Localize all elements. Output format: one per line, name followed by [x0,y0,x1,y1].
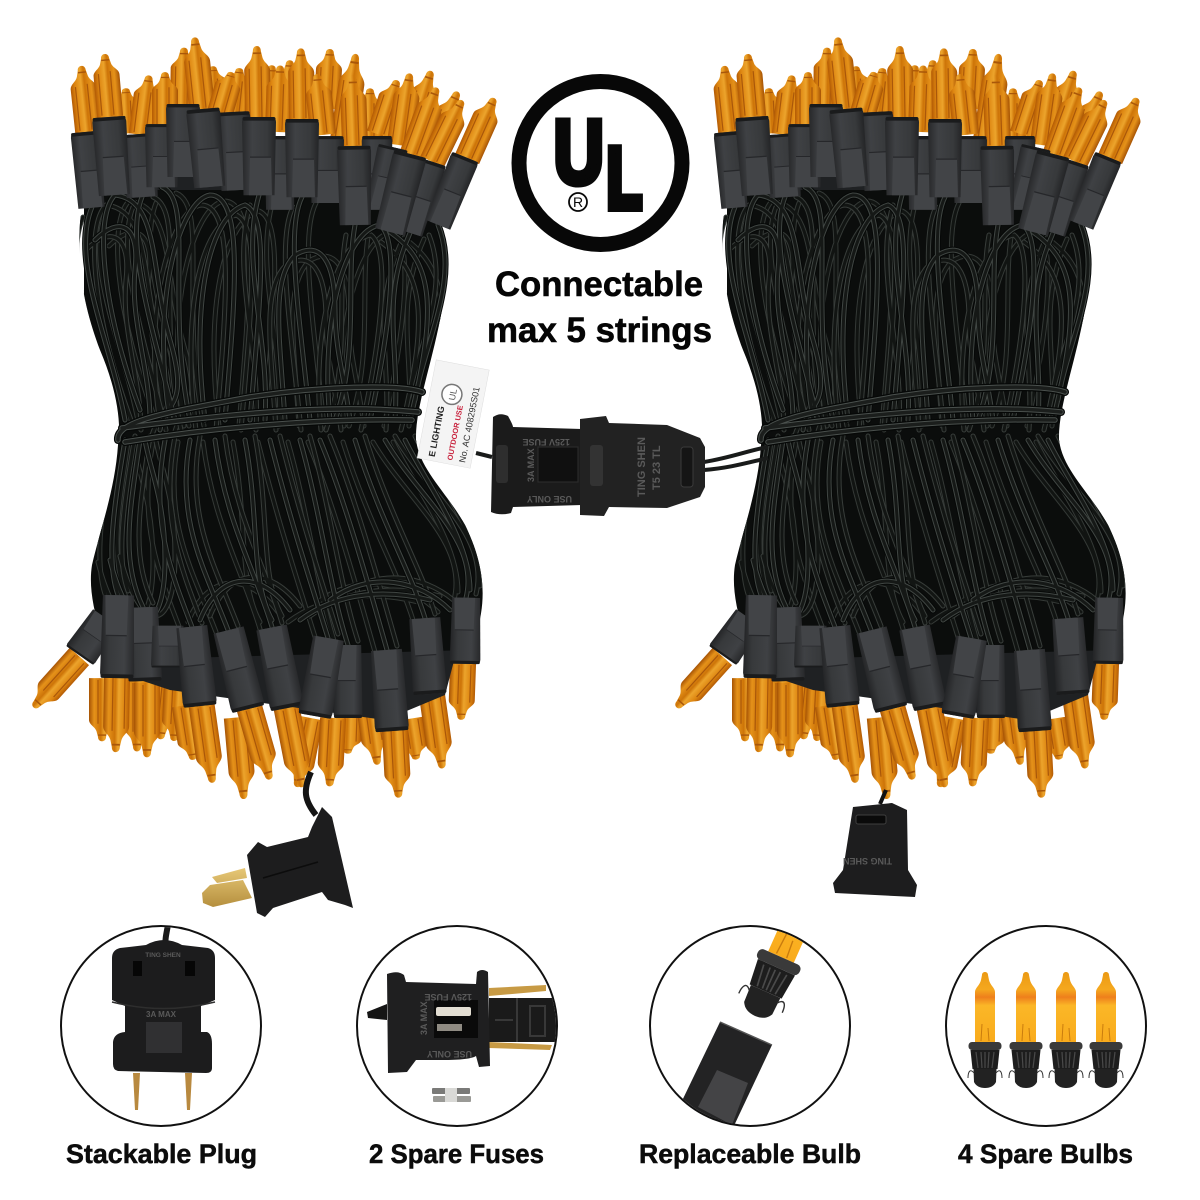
panel: replaceable bulb [649,925,851,1127]
caption: 4 spare bulbs: 4 Spare Bulbs [958,1139,1133,1169]
UL product tag: No. AC 408295S01 [457,386,482,464]
heading: connectable max 5 strings: max 5 strings [487,311,712,350]
UL product tag: E LIGHTING [427,405,446,458]
fuses in compartment [436,1007,471,1016]
plug cord [165,925,168,950]
UL product tag [417,360,489,468]
spare bulb 4 [1089,972,1123,1088]
heading: connectable max 5 strings: Connectable [495,265,703,304]
UL certification logo: R [573,194,583,210]
inline connector: 125V FUSE [522,437,570,447]
panel: 4 spare bulbs [946,926,1146,1126]
light bundle: left [24,36,506,800]
connector wires [476,447,768,470]
empty socket [680,1022,772,1130]
panel: 2 spare fuses: 125V FUSE [424,992,472,1002]
caption: stackable plug: Stackable Plug [66,1139,257,1169]
plug prongs [133,1073,192,1110]
UL product tag: UL [447,388,459,401]
light bundle: right [667,36,1149,800]
panel: 2 spare fuses [357,926,559,1126]
plug cord [306,772,316,815]
panel: stackable plug [61,925,261,1126]
caption: replaceable bulb: Replaceable Bulb [639,1139,861,1169]
inline connector [476,414,768,516]
spare bulb 1 [968,972,1002,1088]
panel: 2 spare fuses: 3A MAX [419,1001,429,1035]
plug body [387,970,490,1073]
inline connector: USE ONLY [527,494,572,504]
gold prongs [489,985,552,1050]
spare fuses [432,1088,471,1102]
UL certification logo: L [607,132,642,226]
bottom sockets [66,595,481,732]
heading: connectable max 5 strings [487,265,712,350]
coiled black wires [77,187,484,660]
plug prongs [202,868,252,907]
plug body [247,807,353,917]
bottom bulbs [24,648,476,800]
connector body [491,414,582,514]
UL certification logo [519,82,682,244]
bulb lifted out [738,930,803,1018]
top bulbs [68,36,506,168]
spare bulb 3 [1049,972,1083,1088]
dark backing behind sockets [90,140,470,720]
inline connector: 3A MAX [526,448,536,482]
wire nub [367,1004,387,1020]
inline connector: TING SHEN [636,437,648,497]
panel: stackable plug: 3A MAX [146,1010,177,1019]
end socket: right string: TING SHEN [843,856,892,866]
top sockets [71,104,479,237]
panel: 2 spare fuses: USE ONLY [427,1049,472,1059]
panel: stackable plug: TING SHEN [145,952,181,959]
spare bulb 2 [1009,972,1043,1088]
caption: 2 spare fuses: 2 Spare Fuses [369,1139,544,1169]
UL product tag: OUTDOOR USE [445,405,465,461]
plug body [112,940,215,1073]
end plug: left string [202,772,353,917]
UL certification logo: U [554,102,604,203]
plug rear body [489,998,559,1042]
inline connector: T5 23 TL [651,445,663,490]
end socket: right string [833,790,917,897]
wire band around bundle [118,387,422,442]
